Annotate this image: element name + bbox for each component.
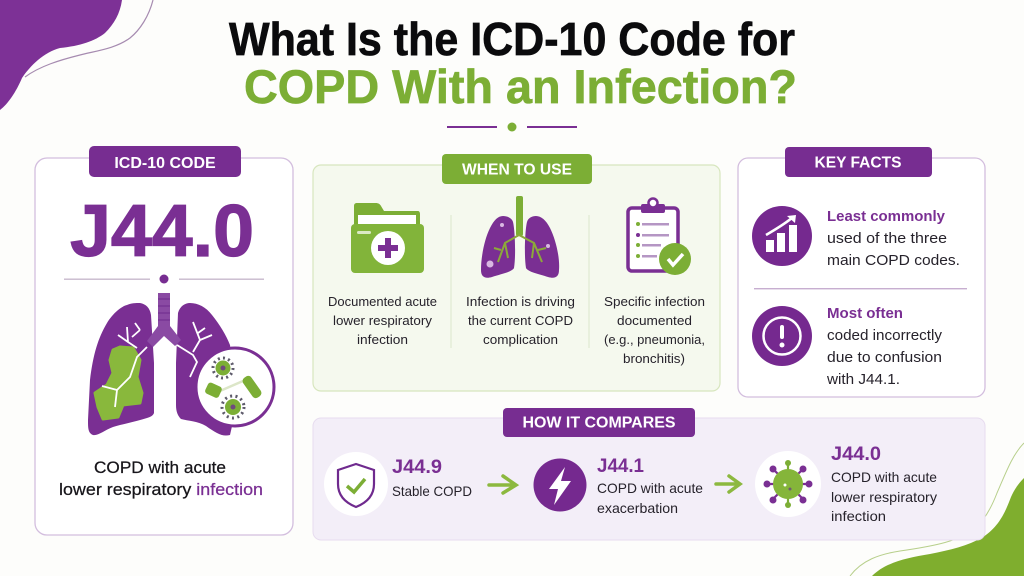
- arrow: [716, 476, 740, 492]
- text: documented acute: Documented acute: [328, 294, 437, 309]
- icon: exclamation: [752, 306, 812, 366]
- text: most often: due to confusion: [827, 349, 942, 366]
- text: documented acute: lower respiratory: [333, 313, 433, 328]
- badge: how it compares: HOW IT COMPARES: [522, 414, 676, 432]
- code: J44.0: J44.0: [70, 191, 254, 272]
- text: infection is driving: Infection is driving: [466, 294, 575, 309]
- badge: ICD-10 code: ICD-10 CODE: [114, 155, 216, 172]
- panel: how it compares: [313, 408, 985, 540]
- icon: rising bar chart: [752, 206, 812, 266]
- title: What Is the ICD-10 Code for: [229, 13, 795, 65]
- text: least commonly: main COPD codes.: [827, 252, 960, 269]
- text: least commonly: [827, 208, 960, 269]
- text: most often: [826, 305, 943, 388]
- text: infection is driving: the current COPD: [468, 313, 573, 328]
- badge: key facts: [785, 147, 932, 177]
- icon: clipboard with check: [628, 198, 691, 275]
- caption: COPD with acute: [94, 458, 226, 477]
- text: specific infection: documented: [617, 313, 692, 328]
- virus and bacteria: [204, 358, 263, 418]
- text: J44.9: [392, 456, 472, 499]
- text: J44.0: infection: [831, 508, 886, 524]
- icon: infected lungs: [88, 293, 274, 436]
- panel: when to use: [313, 154, 720, 391]
- text: J44.0: [831, 443, 937, 524]
- arrow: [489, 476, 516, 493]
- divider: [64, 274, 264, 284]
- text: J44.1: [597, 455, 703, 516]
- decoration: bottom-right green corner: [850, 443, 1024, 576]
- badge: when to use: WHEN TO USE: [462, 162, 572, 178]
- badge: how it compares: [503, 408, 695, 437]
- text: J44.9: Stable COPD: [392, 483, 472, 499]
- text: specific infection: bronchitis): [623, 351, 685, 366]
- caption: [59, 458, 263, 499]
- text: specific infection: Specific infection: [604, 294, 705, 309]
- text: J44.0: J44.0: [831, 443, 881, 465]
- icon: lungs with infection: [481, 196, 559, 278]
- text: least commonly: Least commonly: [827, 208, 946, 225]
- text: infection is driving: complication: [483, 332, 558, 347]
- decoration: top-left purple corner: [0, 0, 153, 110]
- text: J44.1: exacerbation: [597, 500, 678, 516]
- text: least commonly: used of the three: [827, 230, 947, 247]
- icon: lightning bolt: [534, 458, 586, 512]
- text: J44.0: lower respiratory: [831, 489, 937, 505]
- title: COPD With an Infection?: [244, 60, 797, 113]
- text: specific infection: (e.g., pneumonia,: [604, 332, 705, 347]
- text: J44.1: J44.1: [597, 455, 644, 477]
- text: J44.0: COPD with acute: [831, 469, 937, 485]
- text: most often: Most often: [827, 305, 903, 322]
- panel: key facts: [738, 147, 985, 397]
- icon: shield: [324, 452, 388, 516]
- text: documented acute: infection: [357, 332, 408, 347]
- caption: lower respiratory infection: [59, 480, 263, 499]
- icon: virus: [755, 451, 821, 517]
- text: documented acute: [328, 294, 437, 347]
- title: [229, 13, 797, 113]
- text: most often: with J44.1.: [826, 371, 900, 388]
- badge: ICD-10 code: [89, 146, 241, 177]
- panel: ICD-10 code: [35, 146, 293, 535]
- title divider: [447, 122, 577, 132]
- text: most often: coded incorrectly: [827, 327, 943, 344]
- text: infection is driving: [466, 294, 575, 347]
- text: J44.1: COPD with acute: [597, 480, 703, 496]
- badge: when to use: [442, 154, 592, 184]
- text: J44.9: J44.9: [392, 456, 442, 478]
- icon: medical folder: [351, 203, 424, 273]
- badge: key facts: KEY FACTS: [814, 154, 902, 172]
- text: specific infection: [604, 294, 705, 366]
